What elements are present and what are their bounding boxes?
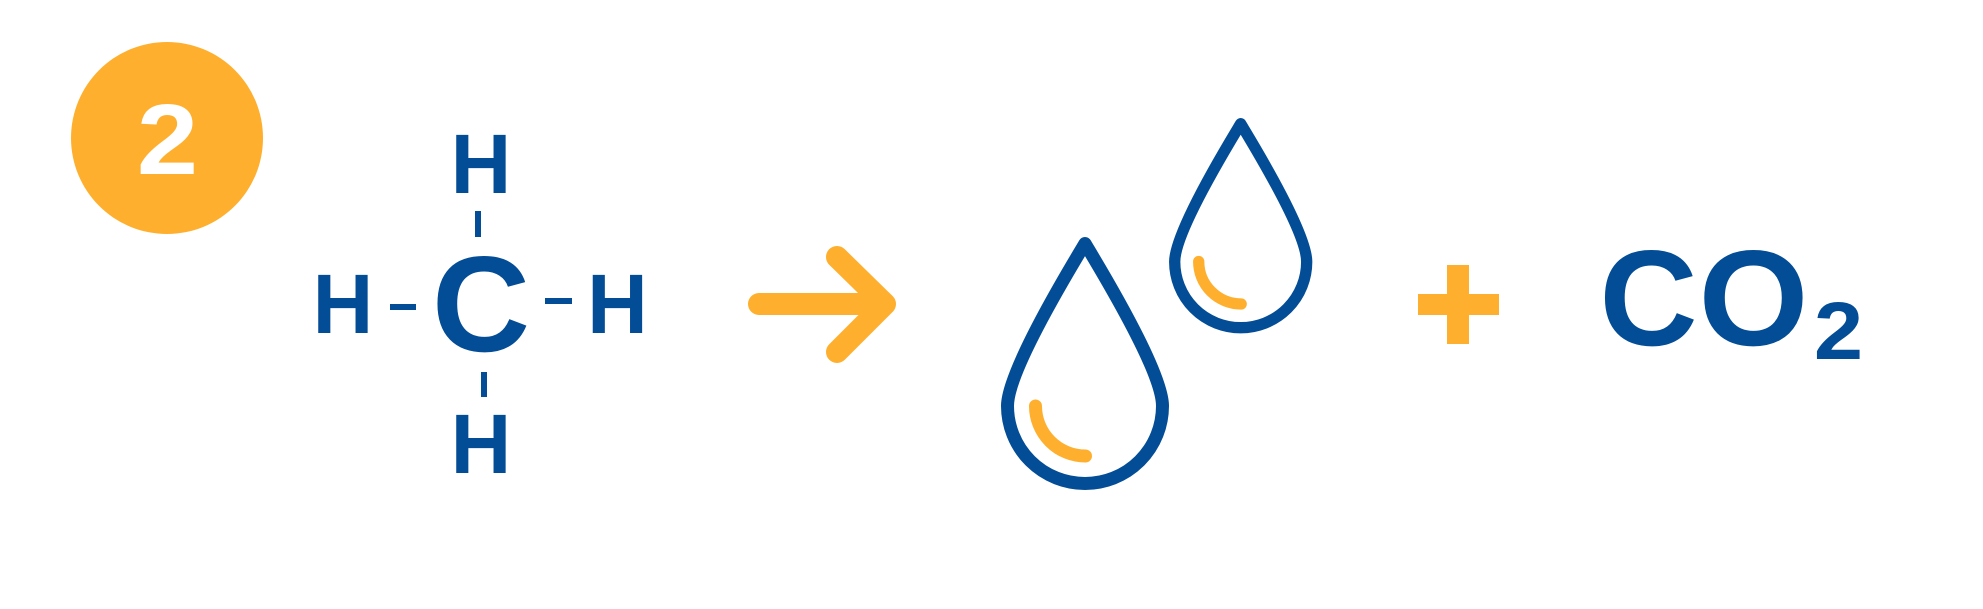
carbon dioxide formula: 2	[1814, 286, 1863, 377]
methane structural formula	[313, 117, 648, 491]
plus sign	[1418, 265, 1499, 344]
bond: top	[475, 211, 481, 237]
hydrogen atom: right: H	[587, 257, 648, 351]
carbon dioxide formula: O	[1698, 222, 1809, 374]
bond: right	[545, 298, 572, 304]
hydrogen atom: top: H	[451, 117, 511, 211]
icon: small water drop	[1175, 124, 1307, 328]
bond: left	[390, 304, 416, 310]
step number badge	[71, 42, 263, 234]
hydrogen atom: bottom: H	[451, 397, 511, 491]
carbon dioxide formula: C	[1599, 222, 1698, 374]
step number badge: 2	[137, 85, 198, 196]
carbon dioxide formula	[1599, 222, 1863, 377]
carbon atom: C	[432, 228, 530, 380]
icon: large water drop	[1008, 244, 1162, 483]
bond: bottom	[481, 372, 487, 397]
hydrogen atom: left: H	[313, 257, 373, 351]
arrow: reaction direction	[759, 257, 885, 352]
